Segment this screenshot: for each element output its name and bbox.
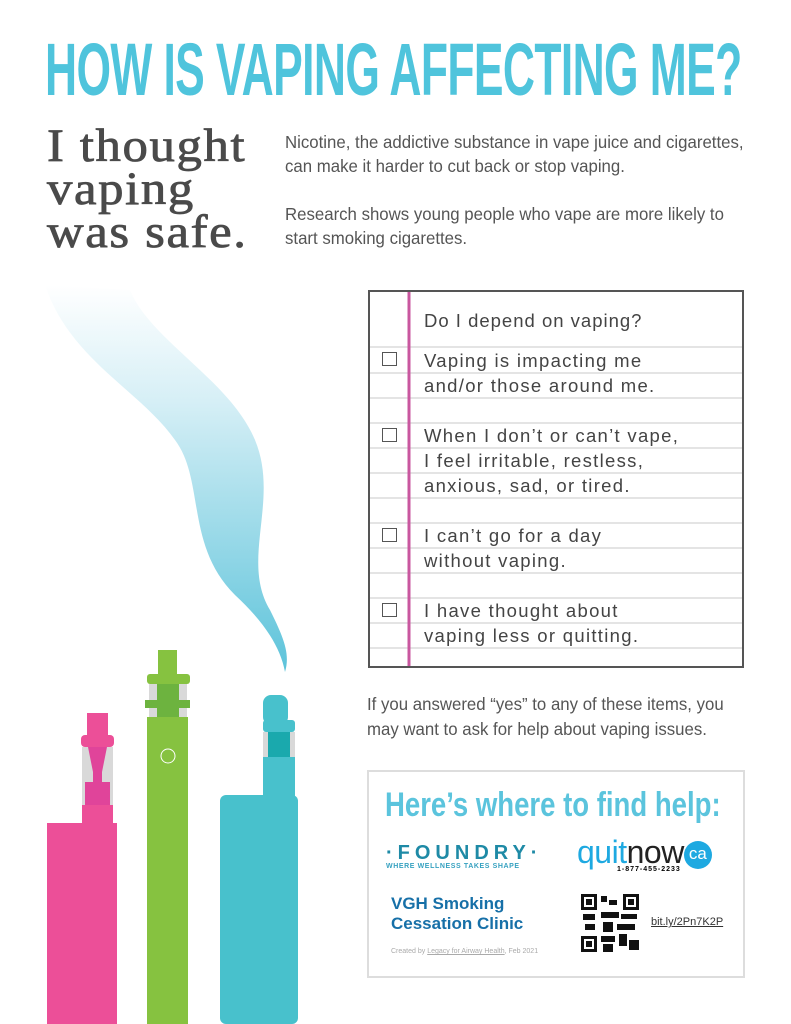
pink vape: [47, 713, 117, 1024]
checklist: anxious, sad, or tired.: [424, 475, 631, 496]
checklist: without vaping.: [424, 550, 567, 571]
logo: foundry: WHERE WELLNESS TAKES SHAPE: [386, 863, 520, 870]
text: if yes: may want to ask for help about vaping issues.: [367, 719, 707, 739]
item 4: [382, 603, 397, 617]
text: research: Research shows young people who vape are more likely to: [285, 204, 724, 224]
text: if yes: [367, 694, 724, 739]
QR code: [581, 894, 639, 952]
logo: quitnow: quitnow: [577, 834, 684, 870]
checklist heading: Do I depend on vaping?: [424, 310, 642, 331]
text: nicotine: can make it harder to cut back or stop vaping.: [285, 156, 625, 176]
text: research: [285, 204, 724, 248]
logo: VGH clinic: [391, 894, 523, 933]
credit: Created by Legacy for Airway Health, Feb 2021: [391, 948, 538, 955]
text: nicotine: [285, 132, 744, 176]
checklist: and/or those around me.: [424, 375, 655, 396]
text: if yes: If you answered “yes” to any of these items, you: [367, 694, 724, 714]
lead statement: [46, 120, 248, 258]
logo: VGH clinic: Cessation Clinic: [391, 914, 523, 933]
checklist: I can’t go for a day: [424, 525, 602, 546]
checklist: vaping less or quitting.: [424, 625, 639, 646]
help panel: [367, 770, 745, 978]
smoke: [45, 285, 287, 672]
checklist: I feel irritable, restless,: [424, 450, 644, 471]
logo: quitnow: ca: [689, 844, 707, 863]
link: bit.ly/2Pn7K2P: [651, 916, 723, 928]
checklist: [368, 290, 744, 668]
logo: quitnow: 1-877-455-2233: [617, 866, 681, 873]
checklist: I have thought about: [424, 600, 619, 621]
item 2: [382, 428, 397, 442]
lead statement: vaping: [47, 163, 195, 215]
title: HOW IS VAPING AFFECTING ME?: [45, 28, 742, 111]
checklist: When I don’t or can’t vape,: [424, 425, 679, 446]
logo: VGH clinic: VGH Smoking: [391, 894, 504, 913]
help heading: Here’s where to find help:: [385, 786, 721, 824]
item 1: [382, 352, 397, 366]
text: nicotine: Nicotine, the addictive substance in vape juice and cigarettes,: [285, 132, 744, 152]
illustration: smoke and vapes: [47, 308, 298, 1024]
cyan vape: [220, 695, 298, 1024]
green vape: [145, 650, 190, 1024]
lead statement: I thought: [47, 120, 246, 172]
item 3: [382, 528, 397, 542]
text: research: start smoking cigarettes.: [285, 228, 467, 248]
logo: foundry: ·FOUNDRY·: [386, 842, 542, 864]
lead statement: was safe.: [47, 206, 248, 258]
checklist: Vaping is impacting me: [424, 350, 642, 371]
